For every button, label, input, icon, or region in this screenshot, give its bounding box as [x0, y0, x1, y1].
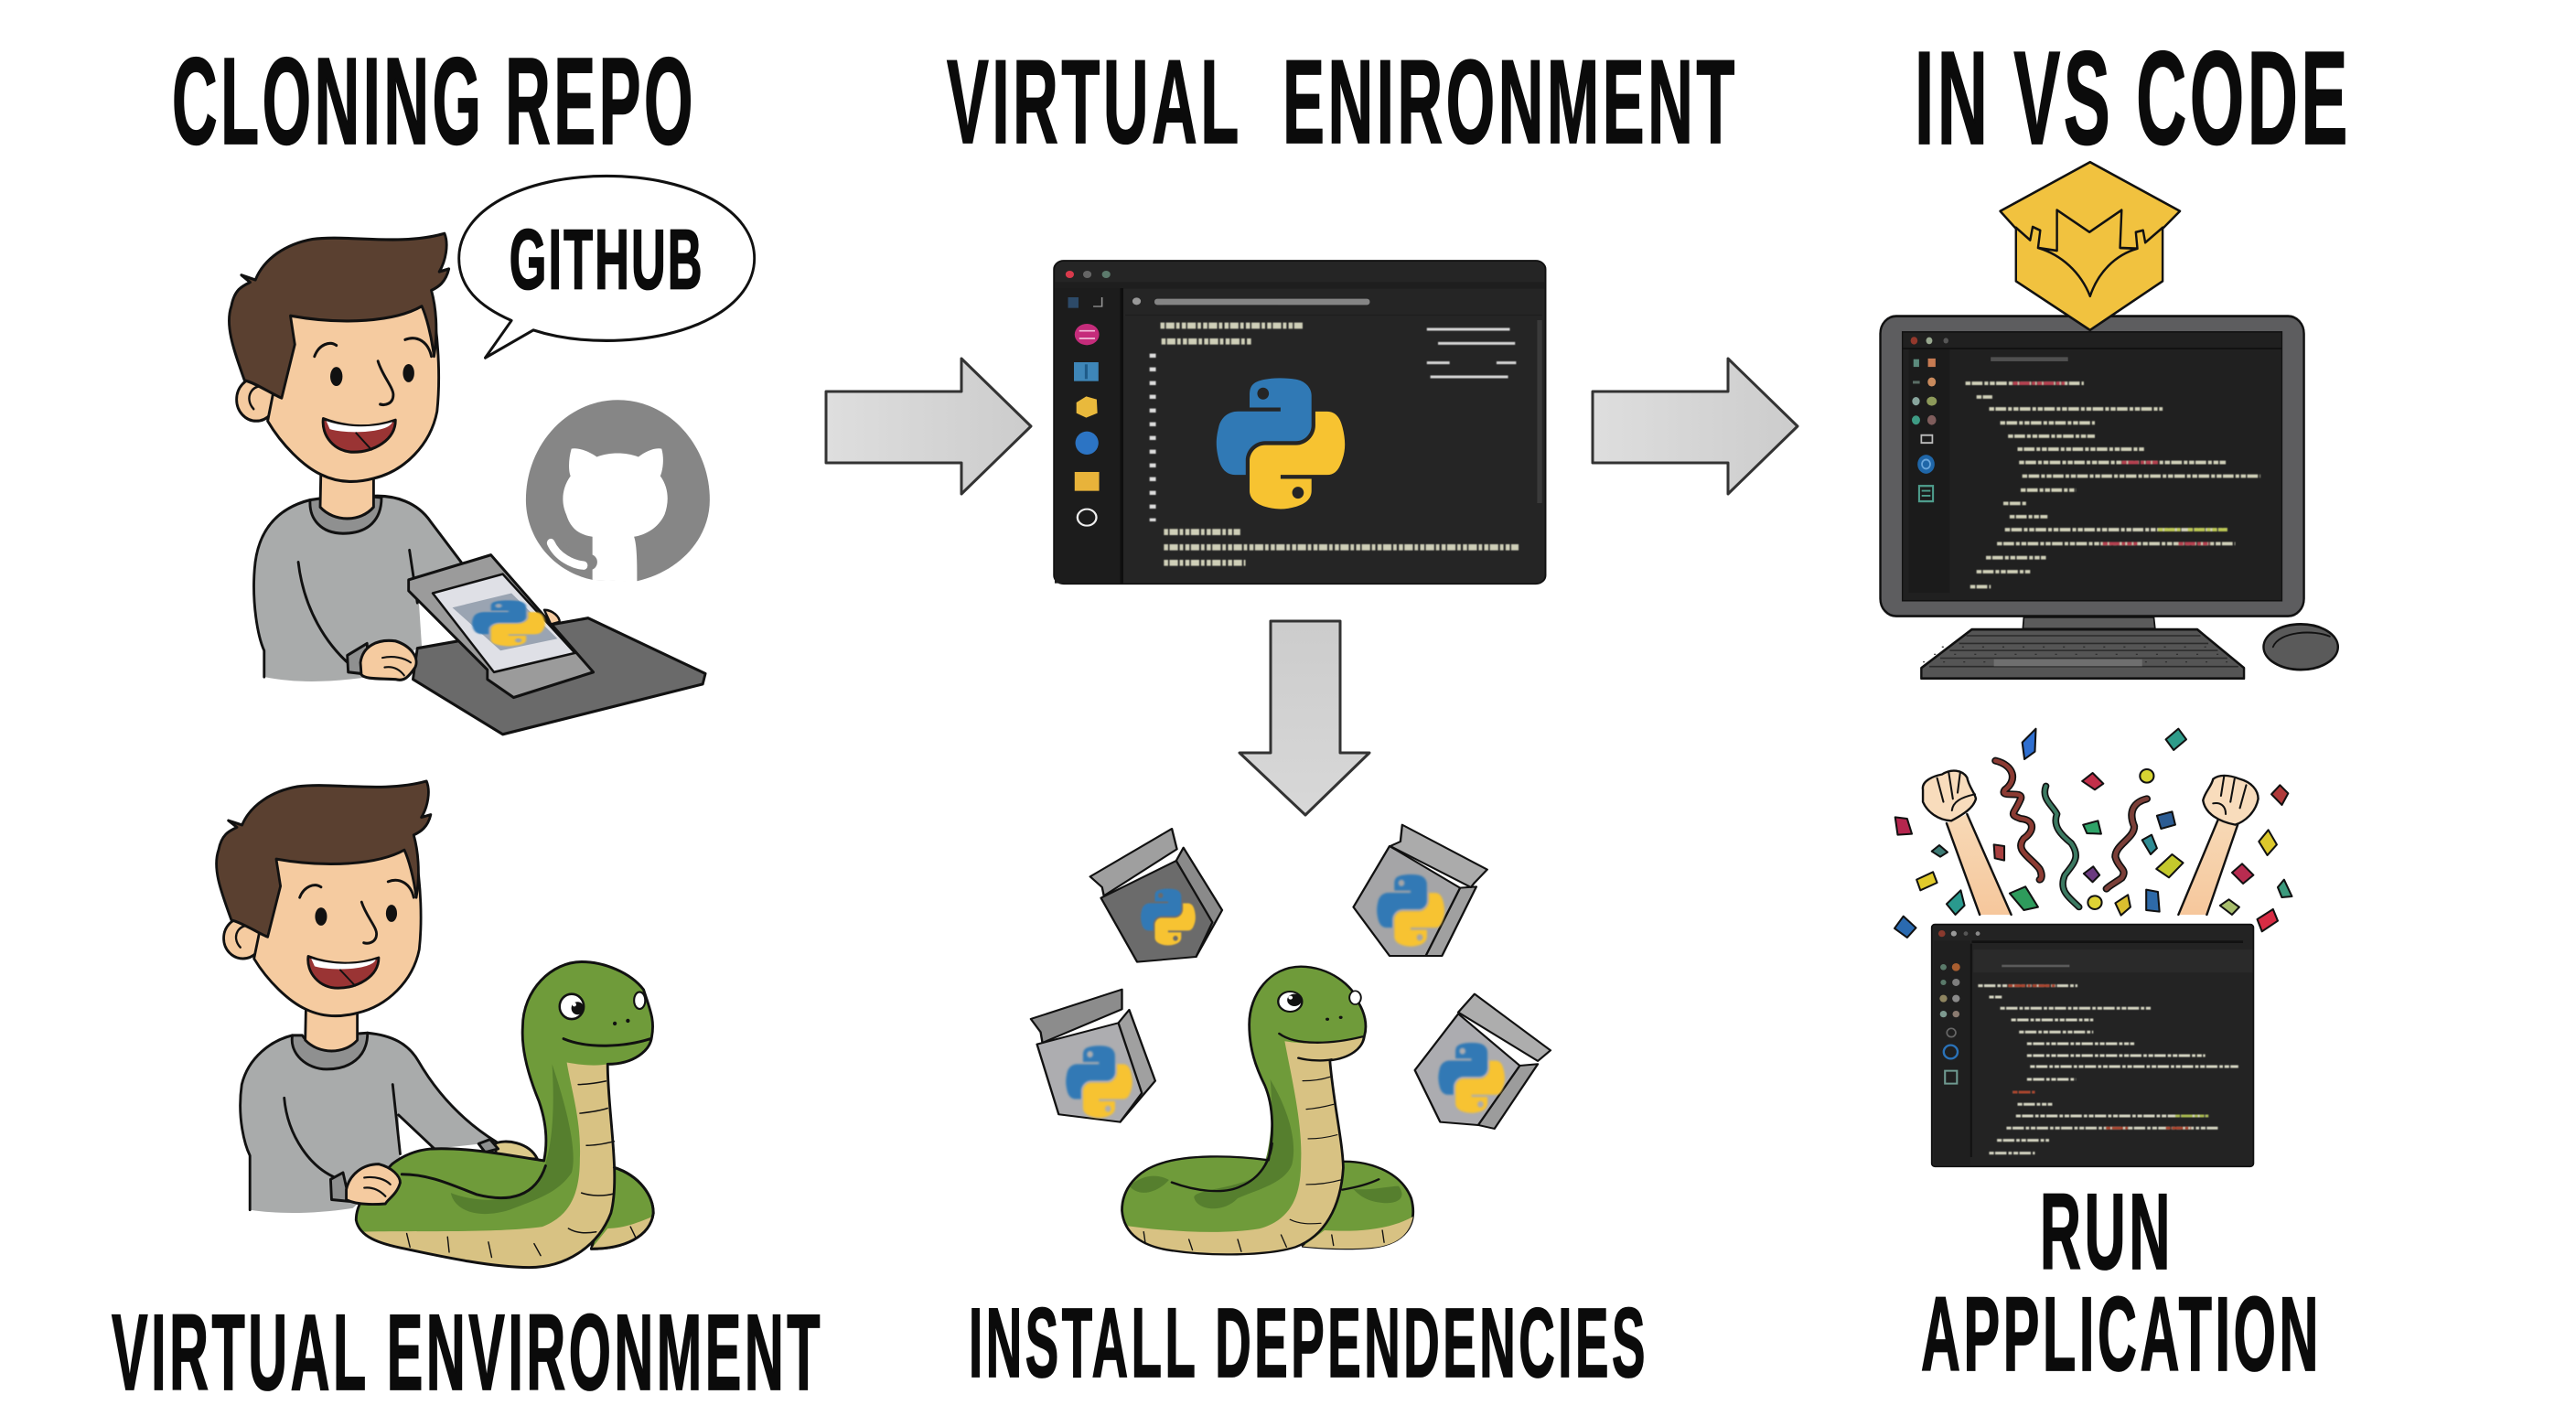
title: cloning repo: CLONING REPO	[172, 32, 696, 170]
panel: virtual environment man and snake	[217, 781, 653, 1268]
window controls	[1066, 271, 1111, 278]
laptop base	[413, 618, 705, 735]
speech bubble: github	[459, 176, 755, 358]
man sweater	[241, 1033, 497, 1213]
title: run application	[1921, 1172, 2322, 1393]
mouse	[2263, 624, 2338, 670]
tablet with python logo	[409, 555, 594, 698]
keyboard	[1921, 629, 2244, 679]
panel: vs code computer	[1881, 162, 2338, 679]
icon: github logo	[526, 400, 710, 582]
package right	[1415, 994, 1551, 1129]
raised arm left	[1923, 771, 2012, 915]
streamers	[1995, 761, 2147, 907]
package top right	[1353, 825, 1487, 956]
hand on snake	[330, 1164, 400, 1205]
code lines	[1966, 383, 2260, 586]
python logo	[1217, 378, 1345, 509]
snake	[1122, 967, 1413, 1254]
panel: run application celebration	[1894, 729, 2292, 1166]
panel: code editor with python logo	[1054, 261, 1546, 584]
man with sweater	[229, 233, 463, 681]
confetti	[1894, 729, 2292, 938]
snake with coil	[330, 961, 653, 1268]
speech bubble: github: GITHUB	[510, 211, 704, 306]
man head	[217, 781, 431, 1051]
hand on laptop	[360, 610, 560, 680]
top bar	[1132, 297, 1369, 305]
sidebar icons	[1911, 337, 1948, 501]
code window	[1932, 925, 2253, 1166]
title: virtual enironment: VIRTUAL ENIRONMENT	[947, 35, 1738, 168]
raised arm right	[2178, 776, 2259, 915]
arrow: environment to dependencies	[1240, 621, 1369, 815]
title: install dependencies: INSTALL DEPENDENCIES	[969, 1287, 1648, 1398]
window code lines	[1978, 986, 2238, 1153]
sidebar icons	[1068, 297, 1102, 526]
code lines	[1153, 326, 1519, 563]
monitor	[1881, 316, 2304, 617]
arrow: environment to vs code	[1593, 359, 1798, 494]
arrow: repo to environment	[826, 359, 1031, 494]
stand	[2023, 617, 2155, 628]
panel: cloning repo illustration	[229, 176, 755, 735]
package top left	[1090, 829, 1222, 962]
vs code box icon	[2001, 162, 2180, 330]
panel: install dependencies	[1031, 825, 1551, 1254]
package left	[1031, 990, 1155, 1122]
title: run application: RUN	[2040, 1172, 2174, 1292]
window sidebar icons	[1939, 963, 1960, 1084]
